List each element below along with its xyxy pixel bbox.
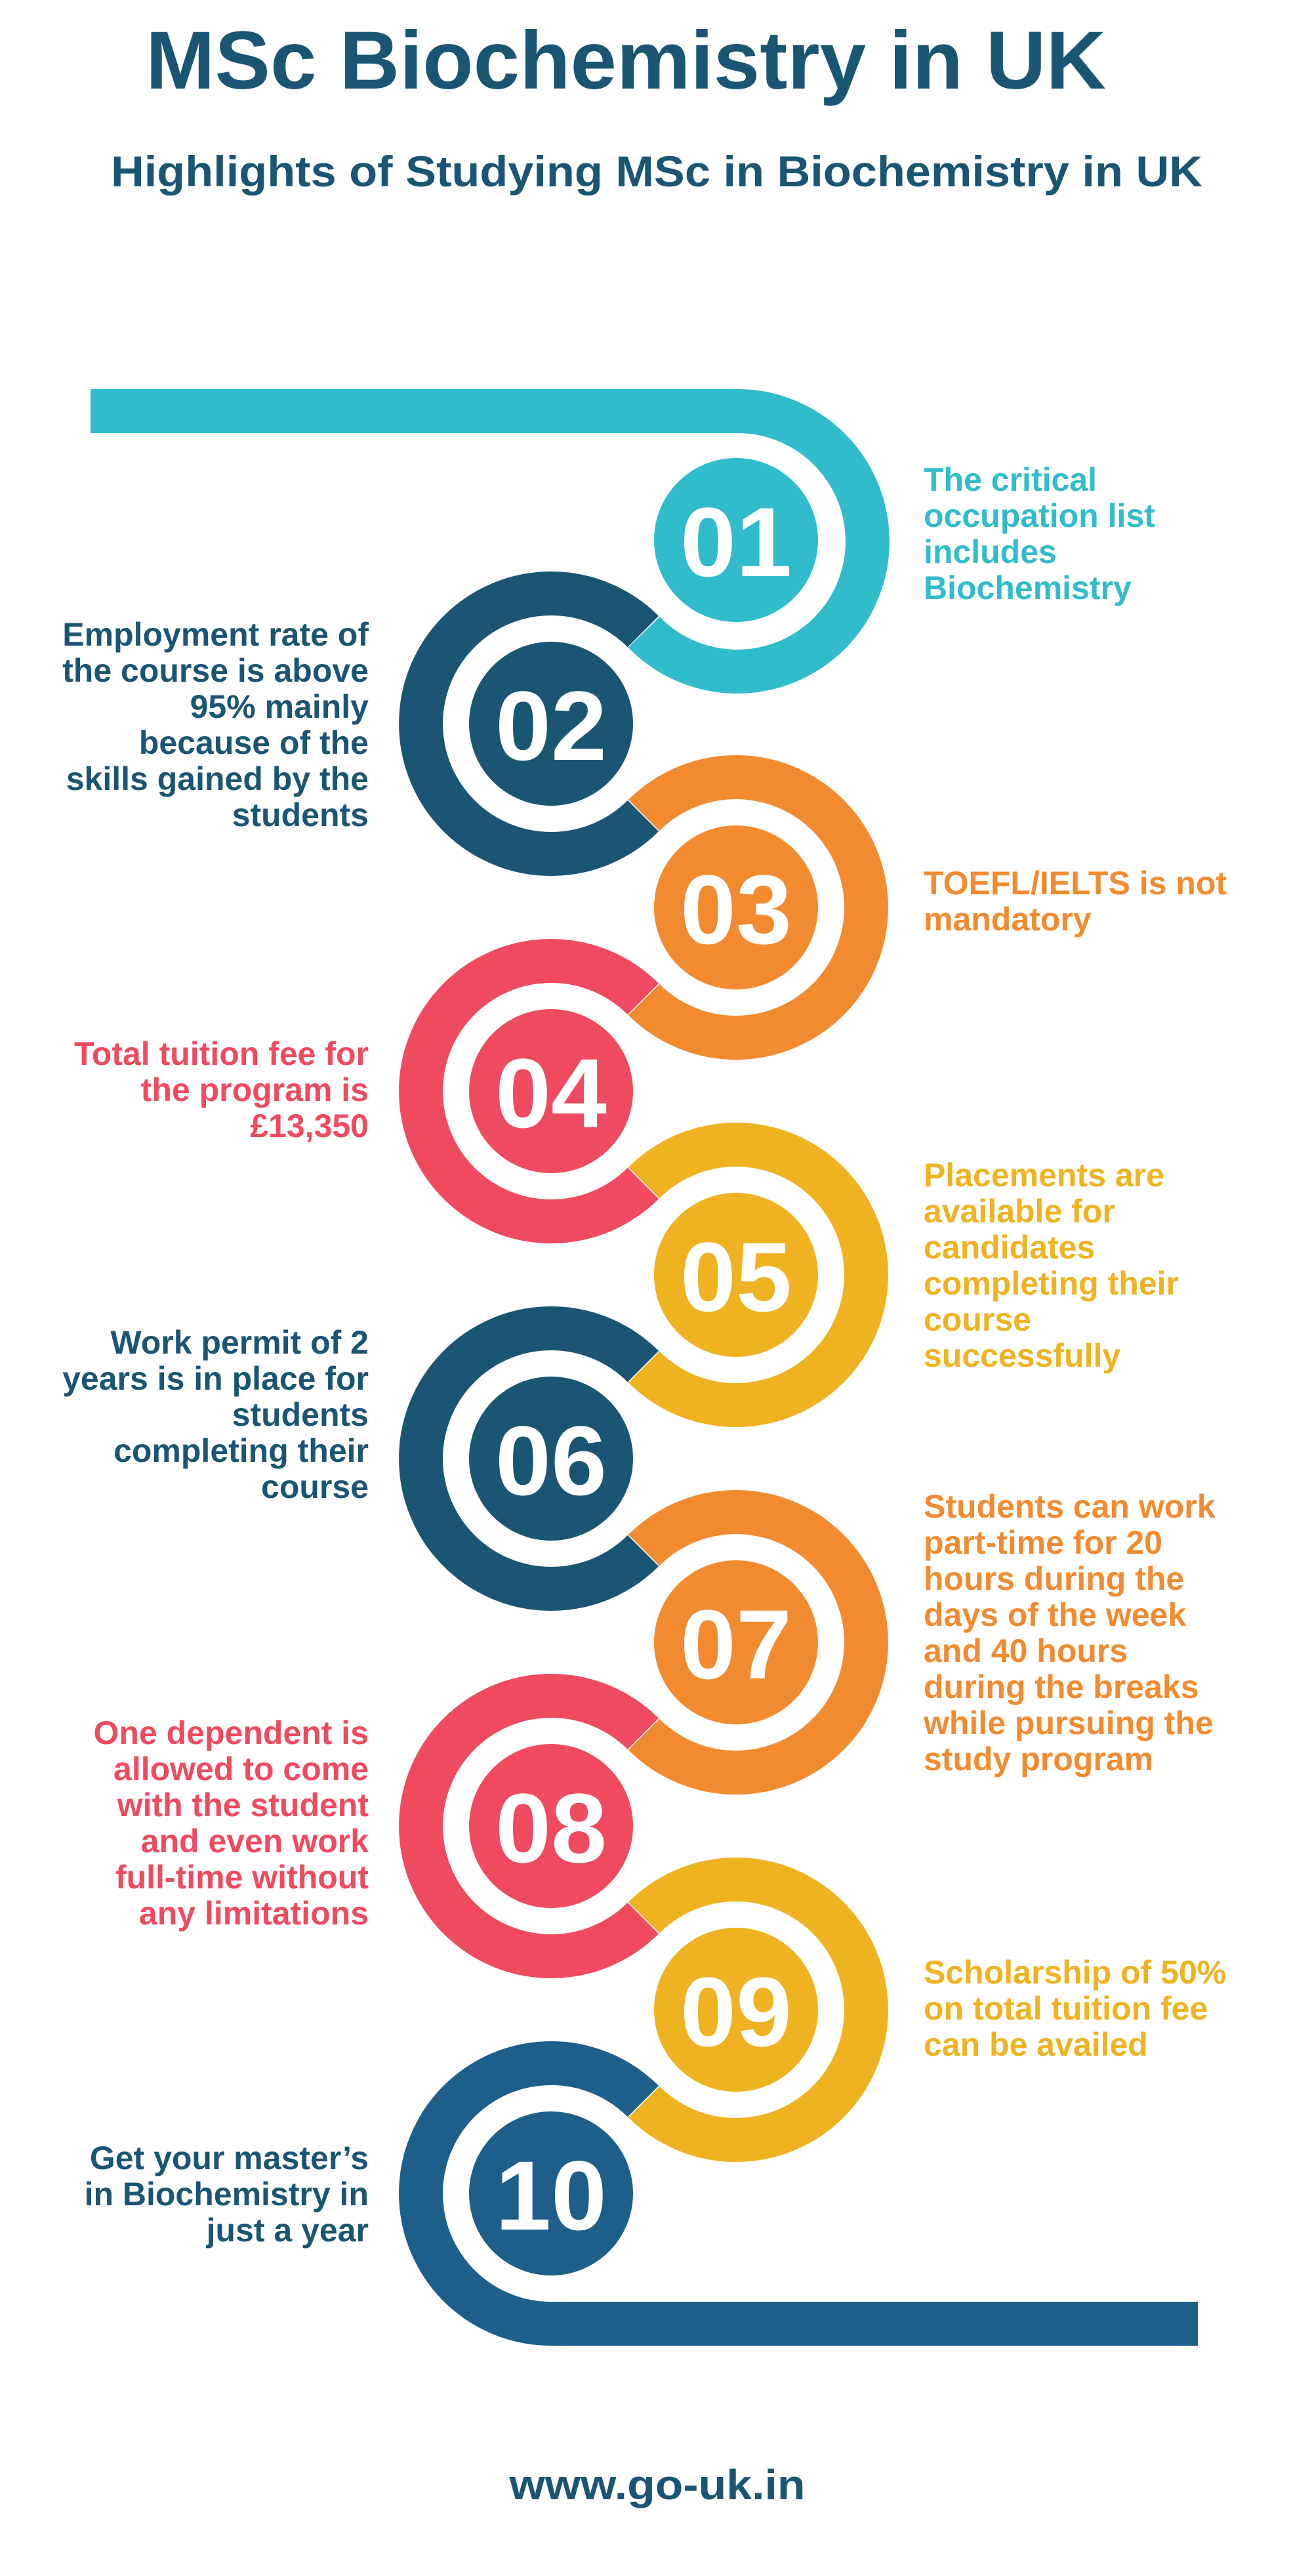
step 10 [85,2063,1198,2324]
step 10: 10 [495,2140,607,2251]
step 09: can be availed [924,2026,1148,2063]
step 08: allowed to come [113,1751,369,1787]
step 07 [644,1488,1216,1777]
step 02: Employment rate of [62,616,369,653]
step 10: Get your master’s [90,2140,369,2176]
step 01: 01 [680,487,792,597]
step 02: 95% mainly [190,688,369,725]
step 09 [644,1880,1226,2140]
step 09: on total tuition fee [924,1990,1208,2027]
step 05: available for [924,1193,1115,1230]
footer url: www.go-uk.in [508,2461,806,2508]
step 04: £13,350 [250,1108,369,1144]
step 05: Placements are [924,1157,1164,1194]
step 03: mandatory [924,901,1092,938]
step 06: years is in place for [62,1360,369,1397]
step 05: candidates [924,1229,1095,1266]
step 02: 02 [495,671,607,781]
step 06 [62,1324,643,1589]
step 06: students [232,1396,369,1433]
step 02: skills gained by the [66,760,369,797]
step 06: course [261,1468,369,1505]
step 05: completing their [924,1265,1179,1302]
step 04: the program is [141,1071,369,1108]
step 07: and 40 hours [924,1632,1128,1669]
step 08: any limitations [139,1895,369,1932]
step 01: Biochemistry [924,570,1132,606]
step 01: includes [924,533,1057,570]
step 03 [644,777,1227,1038]
step 08: with the student [117,1787,369,1823]
step 03: TOEFL/IELTS is not [924,865,1227,902]
step 02: the course is above [62,652,369,689]
step 04: 04 [495,1038,607,1148]
step 10: in Biochemistry in [85,2176,369,2212]
title: MSc Biochemistry in UK [146,15,1106,106]
step 08: full-time without [115,1859,369,1896]
step 03: 03 [680,854,792,965]
step 02 [62,593,643,854]
step 07: days of the week [924,1596,1186,1633]
step 07: Students can work [924,1488,1216,1525]
step 02: students [232,797,369,833]
step 01: occupation list [924,497,1155,534]
step 08: 08 [495,1773,607,1883]
step 05: course [924,1301,1031,1338]
step 02: because of the [139,724,369,761]
step 05 [644,1144,1179,1405]
step 09: Scholarship of 50% [924,1954,1226,1991]
step 08: and even work [141,1823,369,1859]
step 05: successfully [924,1337,1120,1374]
step 10: just a year [206,2212,369,2249]
step 01: The critical [924,461,1097,498]
step 09: 09 [680,1957,792,2067]
step 06: Work permit of 2 [110,1324,369,1361]
step 07: study program [924,1741,1153,1777]
step 07: while pursuing the [923,1705,1214,1741]
subtitle: Highlights of Studying MSc in Biochemistry in UK [111,147,1202,196]
step 07: 07 [680,1589,792,1699]
step 07: during the breaks [924,1669,1199,1705]
step 07: part-time for 20 [924,1524,1162,1561]
step 06: completing their [113,1432,369,1469]
step 04: Total tuition fee for [74,1035,369,1072]
step 08 [93,1695,643,1957]
step 06: 06 [495,1405,607,1516]
step 05: 05 [680,1222,792,1332]
step 01 [91,411,1155,671]
step 07: hours during the [924,1560,1184,1597]
step 04 [74,961,643,1221]
step 08: One dependent is [93,1714,369,1751]
